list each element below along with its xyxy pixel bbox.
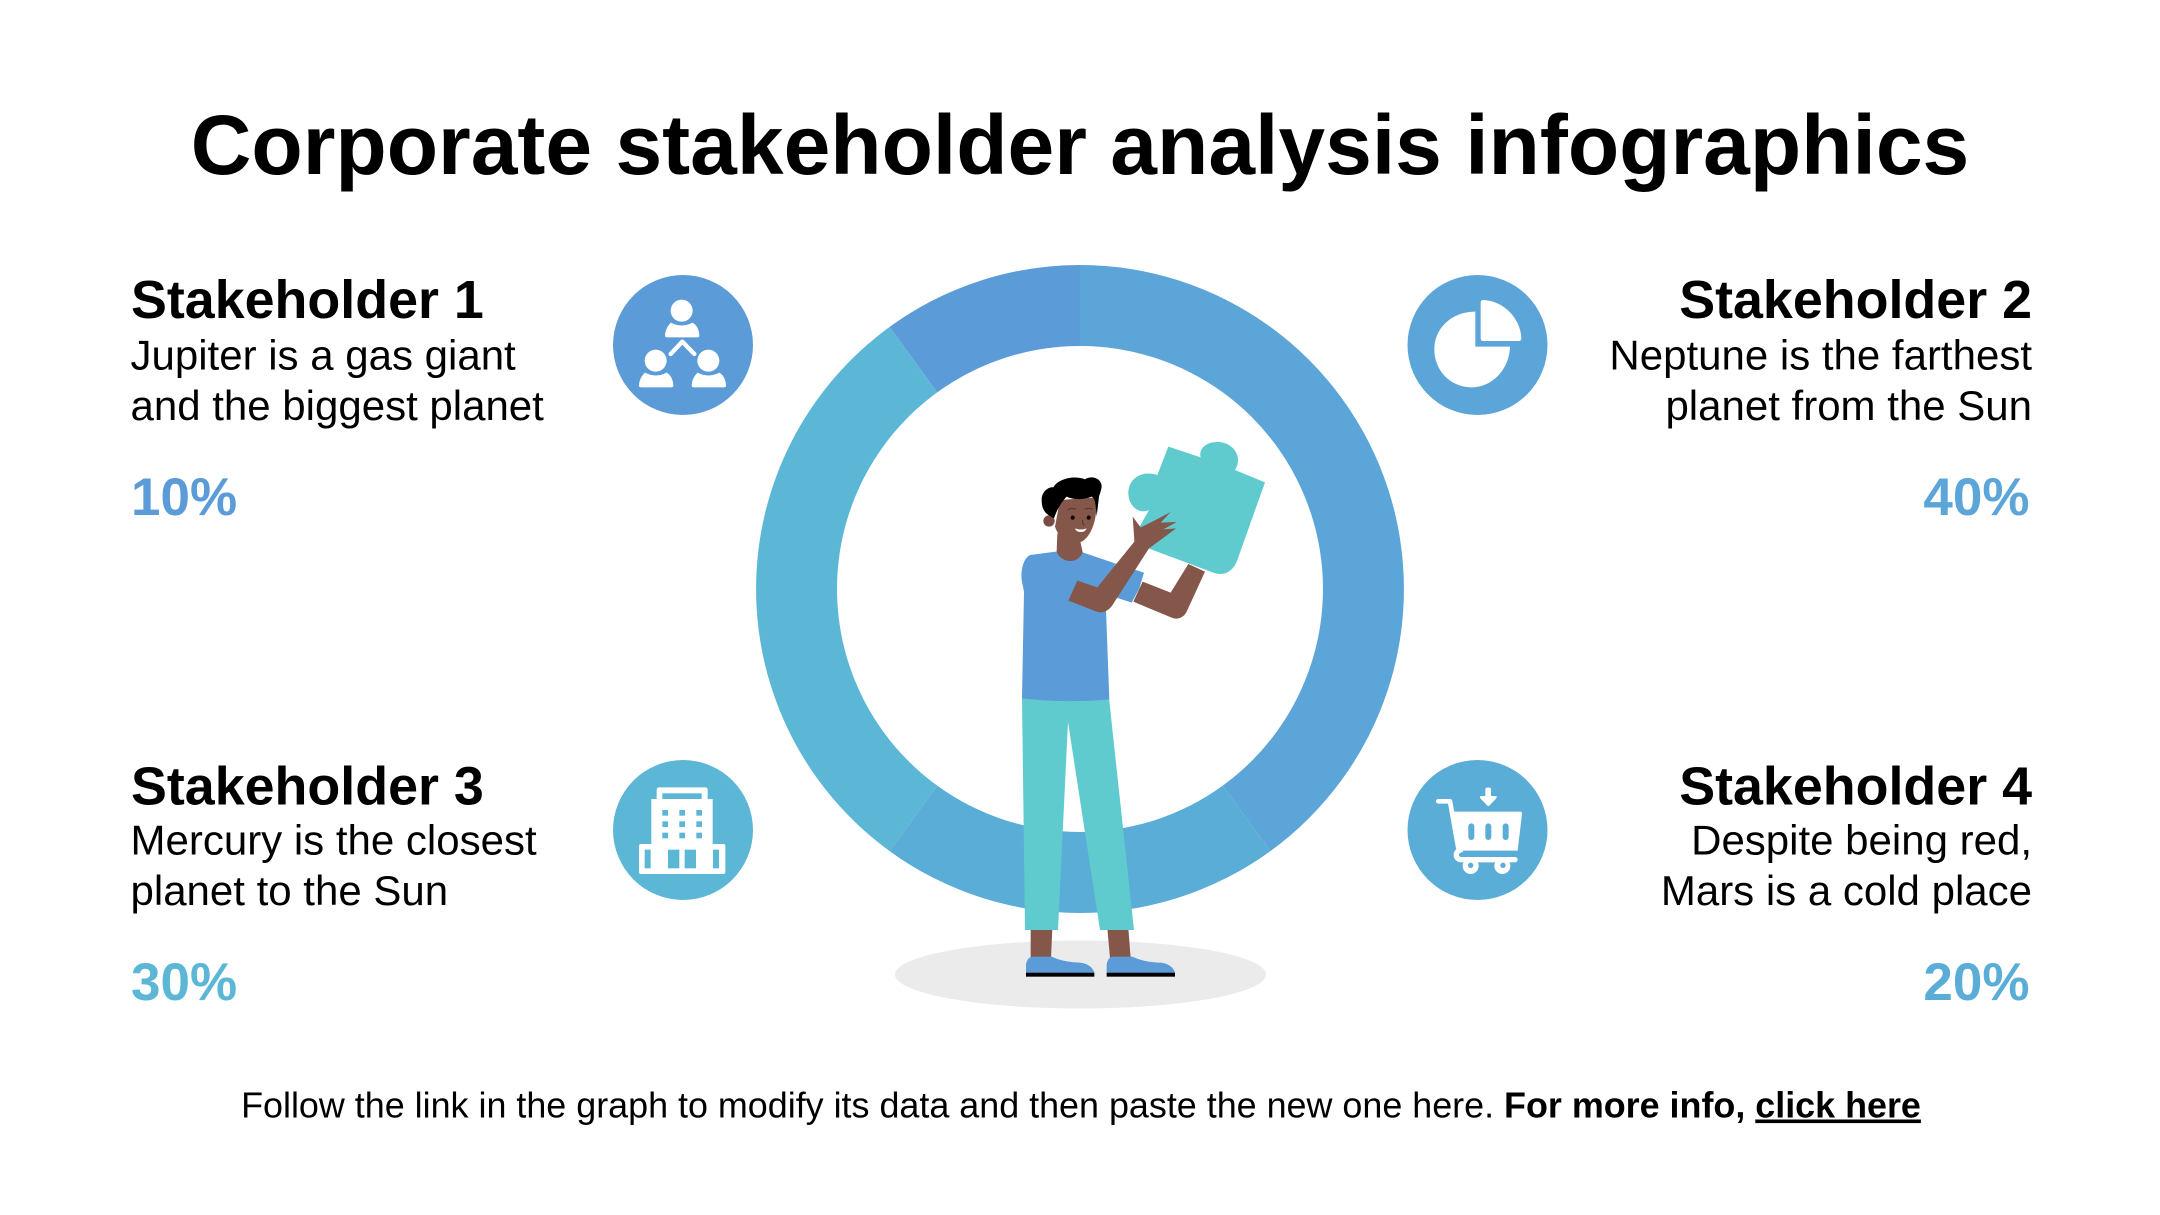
heading: Stakeholder 4: [1679, 756, 2032, 816]
description: Despite being red,: [1691, 816, 2032, 864]
panel: stakeholder 1: [130, 270, 753, 527]
title: Corporate stakeholder analysis infographics: [191, 98, 1969, 192]
torso and head: [1021, 477, 1177, 701]
legs and shoes: [1026, 928, 1175, 977]
heading: Stakeholder 1: [131, 270, 484, 330]
puzzle piece: [1128, 442, 1265, 574]
heading: Stakeholder 2: [1679, 270, 2032, 330]
footer note: Follow the link in the graph to modify its data and then paste the new one here. For more info, click here: [241, 1086, 1921, 1126]
eyebrows and nose: [1067, 508, 1093, 525]
sleeve: [1113, 563, 1144, 603]
ground shadow: [895, 940, 1266, 1008]
hair: [1042, 477, 1102, 518]
trousers: [1022, 698, 1134, 930]
back arm: [1133, 564, 1205, 619]
illustration: person holding puzzle piece: [1021, 442, 1265, 977]
percentage: 40%: [1923, 468, 2030, 527]
percentage: 30%: [131, 953, 237, 1012]
description: Neptune is the farthest: [1609, 332, 2032, 378]
panel: stakeholder 2: [1408, 270, 2032, 527]
ear: [1043, 515, 1055, 527]
description: planet from the Sun: [1665, 382, 2032, 429]
shirt: [1021, 552, 1115, 701]
smile: [1075, 528, 1087, 532]
segment: stakeholder 1, 10%: [890, 265, 1080, 392]
description: planet to the Sun: [130, 867, 448, 914]
heading: Stakeholder 3: [131, 756, 484, 816]
front arm and hand: [1068, 512, 1177, 612]
icon: shopping cart: [1408, 760, 1548, 900]
segment: stakeholder 4, 20%: [890, 786, 1270, 913]
face: [1055, 497, 1096, 543]
donut chart: [756, 265, 1404, 913]
percentage: 10%: [131, 468, 237, 527]
segment: stakeholder 3, 30%: [756, 327, 937, 851]
icon: pie chart: [1408, 275, 1548, 415]
description: Mars is a cold place: [1661, 867, 2032, 914]
description: Jupiter is a gas giant: [130, 332, 516, 378]
description: Mercury is the closest: [130, 816, 537, 864]
percentage: 20%: [1923, 953, 2030, 1012]
neck: [1057, 533, 1083, 561]
eyes: [1071, 516, 1091, 520]
segment: stakeholder 2, 40%: [1080, 265, 1404, 851]
panel: stakeholder 3: [130, 756, 753, 1012]
icon: people network: [613, 275, 753, 415]
description: and the biggest planet: [130, 382, 544, 429]
panel: stakeholder 4: [1408, 756, 2032, 1012]
icon: office building: [613, 760, 753, 900]
